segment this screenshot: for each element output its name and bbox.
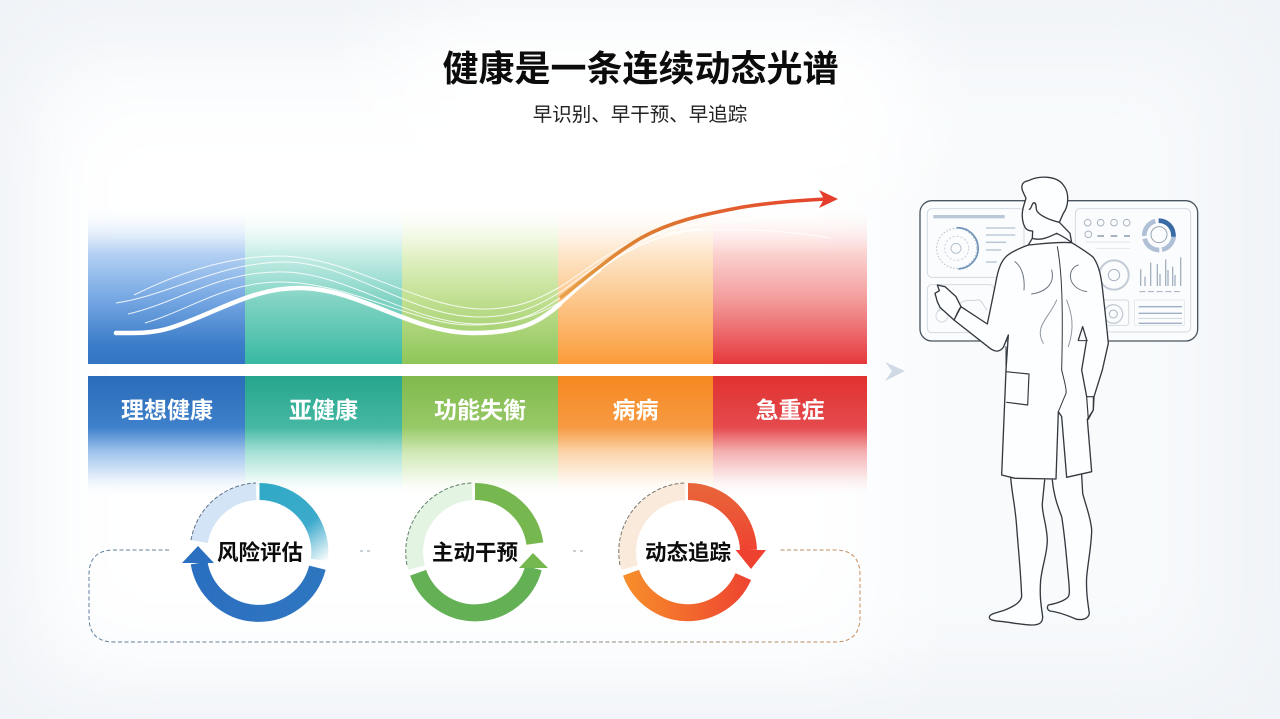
rising red arrow — [560, 190, 838, 298]
stage: functional imbalance: 功能失衡 — [434, 397, 526, 423]
title: 健康是一条连续动态光谱 — [442, 48, 839, 89]
dashboard screen — [920, 201, 1198, 341]
dashboard screen and doctor — [920, 177, 1198, 625]
thin trend lines — [116, 219, 830, 325]
stage: illness: 病病 — [612, 397, 658, 423]
spectrum panel — [88, 205, 867, 364]
legs — [989, 475, 1092, 625]
coat details — [1006, 242, 1094, 419]
stage label bar — [88, 376, 867, 498]
hand on screen — [935, 285, 961, 320]
cycle: dynamic tracking — [619, 483, 766, 613]
stage: illness — [558, 376, 713, 498]
cycle: risk assessment — [182, 483, 320, 613]
small chevron arrow — [885, 362, 905, 381]
stage: functional imbalance — [402, 376, 558, 498]
cycle: active intervention — [406, 483, 548, 613]
stage: ideal health — [88, 376, 245, 498]
stage: ideal health: 理想健康 — [121, 397, 213, 423]
lab coat — [954, 233, 1108, 479]
dashed feedback loop — [89, 550, 860, 642]
stage: critical — [713, 376, 867, 498]
stage: critical: 急重症 — [756, 397, 824, 423]
cycle: risk assessment: 风险评估 — [217, 540, 303, 565]
connector dots — [360, 550, 583, 552]
main white curve — [116, 229, 700, 333]
head and hair — [1022, 177, 1072, 245]
subtitle: 早识别、早干预、早追踪 — [533, 104, 747, 126]
cycle: dynamic tracking: 动态追踪 — [645, 540, 731, 565]
doctor figure — [935, 177, 1108, 625]
stage: sub-health — [245, 376, 402, 498]
stage: sub-health: 亚健康 — [289, 397, 358, 423]
cycle: active intervention: 主动干预 — [432, 541, 518, 565]
